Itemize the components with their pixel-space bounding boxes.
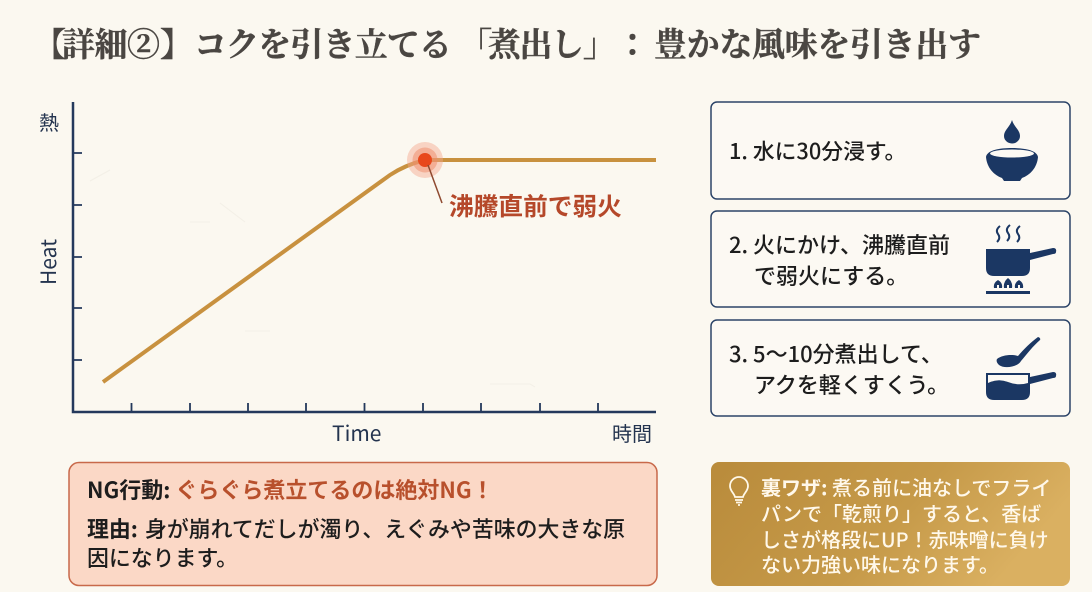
- NG heading: NG行動: ぐらぐら煮立てるのは絶対NG！: [87, 473, 494, 505]
- tip text: パンで「乾煎り」すると、香ば: [761, 498, 1041, 527]
- title: コクを引き立てる: [194, 19, 452, 66]
- tip text: 裏ワザ:: [761, 472, 828, 501]
- callout: 沸騰直前で弱火: 沸騰直前で弱火: [449, 187, 622, 223]
- title: 煮出し: [488, 19, 584, 66]
- y axis label: 熱: 熱: [39, 107, 59, 136]
- icon: pot on flame: [986, 225, 1056, 294]
- panel: pro tip: [711, 462, 1070, 586]
- icon: water drop and bowl: [986, 120, 1038, 181]
- title: 豊かな風味を引き出す: [654, 19, 981, 66]
- simmer point marker: [407, 142, 443, 178]
- step 3 text: アクを軽くすくう。: [754, 368, 949, 400]
- leader line: [428, 165, 442, 203]
- x axis label: 時間: 時間: [612, 418, 652, 447]
- title: [33, 19, 981, 66]
- panel: step 2: [711, 211, 1070, 307]
- tip text: ない力強い味になります。: [761, 549, 999, 578]
- axes and ticks: [73, 102, 656, 412]
- icon: light bulb: [730, 477, 748, 505]
- x axis label: Time: Time: [332, 418, 381, 448]
- heat curve: [103, 160, 656, 382]
- title: 」: [583, 19, 616, 66]
- step 1 text: 1. 水に30分浸す。: [729, 135, 906, 166]
- title: 詳細②: [62, 19, 160, 66]
- step 2 text: で弱火にする。: [754, 259, 908, 291]
- step 3 text: 3. 5〜10分煮出して、: [729, 337, 943, 369]
- reason text: 因になります。: [87, 542, 238, 573]
- reason text: 理由:: [87, 513, 138, 544]
- title: ：: [616, 19, 649, 66]
- panel: step 1: [711, 102, 1070, 199]
- line chart: heat over time: [33, 102, 656, 448]
- title: 【: [33, 19, 66, 66]
- reason text: 身が崩れてだしが濁り、えぐみや苦味の大きな原: [145, 513, 625, 544]
- panel: step 3: [711, 320, 1070, 416]
- tip text: しさが格段にUP！赤味噌に負け: [761, 524, 1049, 553]
- title: 「: [459, 19, 492, 66]
- tip text: 煮る前に油なしでフライ: [828, 472, 1051, 501]
- icon: ladle and pot: [986, 337, 1056, 400]
- step 2 text: 2. 火にかけ、沸騰直前: [729, 228, 950, 260]
- y axis label: Heat: Heat: [33, 239, 63, 285]
- title: 】: [160, 19, 193, 66]
- panel: NG warning: [69, 462, 657, 586]
